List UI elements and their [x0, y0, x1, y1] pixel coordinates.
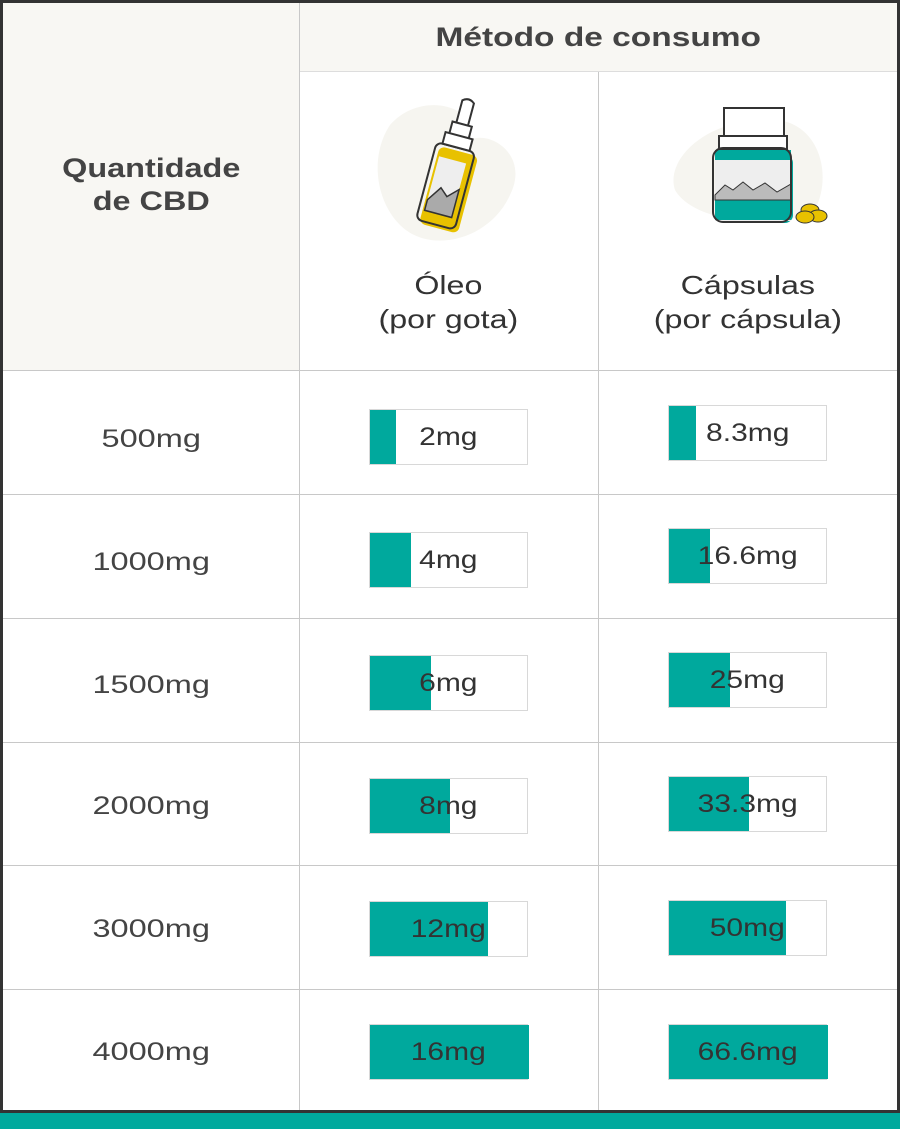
text: 25mg [710, 666, 785, 694]
text: 16.6mg [697, 542, 798, 570]
label: Óleo [379, 270, 518, 334]
text: 8mg [419, 792, 478, 820]
label: Cápsulas: Cápsulas [680, 270, 815, 300]
label: Cápsulas [653, 270, 842, 334]
text: 4000mg [92, 1038, 210, 1066]
heading: Quantidade de CBD: Quantidade [62, 153, 240, 183]
label: Óleo: Óleo [414, 270, 483, 300]
heading: Quantidade de CBD [62, 153, 240, 216]
text: 16mg [411, 1038, 486, 1066]
text: 12mg [411, 915, 486, 943]
text: 1500mg [92, 671, 210, 699]
text: 3000mg [92, 915, 210, 943]
text: 6mg [419, 669, 478, 697]
capsule bars: 8.3mg [706, 419, 789, 447]
header background column 1 [3, 3, 299, 370]
capsule bars [668, 405, 827, 461]
footer teal band [0, 1113, 900, 1129]
title: Método de consumo: Método de consumo [435, 22, 761, 52]
oil bars [369, 409, 528, 465]
row labels: 500mg [101, 425, 201, 453]
header band [299, 3, 897, 72]
icon: capsule jar [674, 107, 828, 224]
text: 2000mg [92, 792, 210, 820]
label: Cápsulas: (por cápsula) [653, 304, 842, 334]
oil bars: 2mg [419, 423, 478, 451]
label: Óleo: (por gota) [379, 304, 518, 334]
text: 4mg [419, 546, 478, 574]
text: 50mg [710, 914, 785, 942]
text: 33.3mg [697, 790, 798, 818]
heading: Quantidade de CBD: de CBD [92, 186, 210, 216]
icon: oil dropper bottle [378, 98, 516, 240]
text: 1000mg [92, 548, 210, 576]
text: 66.6mg [697, 1038, 798, 1066]
